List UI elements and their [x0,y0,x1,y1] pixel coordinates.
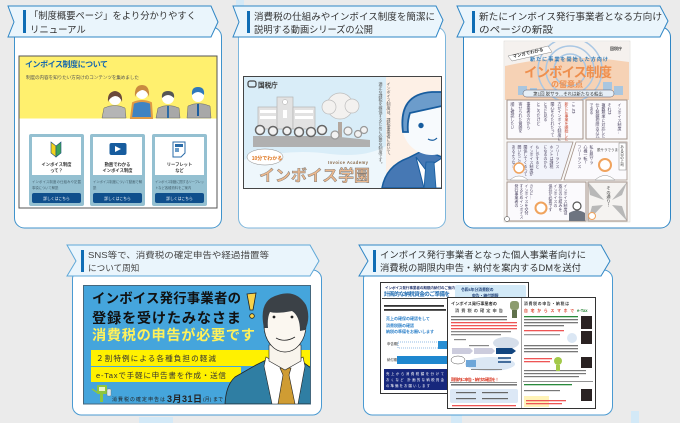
card: leaflets [152,134,207,206]
banner: panel 1 heading [8,6,218,37]
manga panel: row 3 left: インボイス制度は [563,183,568,216]
banner: panel 1 heading: リニューアル [30,24,86,35]
banner: panel 2 heading: 説明する動画シリーズの公開 [254,24,373,35]
manga panel: row 2 right: 脱サラでうまく [597,147,622,152]
card: leaflets: インボイス制度に関するリーフレッ [155,179,204,184]
yellow strip: e-Tax: e-Taxで手軽に申告書を作成・送信 [96,370,226,380]
manga panel: row 2 left [507,142,573,180]
manga panel: row 1 left: ここは [571,101,576,114]
manga panel: row 1 right: である [589,103,594,115]
front sheet: flow diagram [451,337,519,371]
background connector shapes [139,0,639,423]
manga panel: row 2 left: になるのかも [543,145,548,168]
yellow strip: 20% special provision [91,350,310,366]
manga panel: row 3 left: インボイスの [553,183,558,208]
manga subtitle bubble: マンガでわかる [512,46,544,60]
card: leaflets: など [175,167,184,173]
mascot: tax robot [510,301,519,318]
mascot: green robot [92,385,111,402]
manga panel: row 3 left: 発行事業者の [514,183,520,208]
thumbnail title: インボイス学園 [259,166,370,185]
card: video explanation [90,134,145,206]
illustration: businessman [225,293,311,404]
manga panel: row 2 left: もしかすると [535,144,540,168]
chapter banner: 第1回 脱サラ…それは新たなる船出 [533,90,603,98]
manga panel: row 2 right: フリーランス [577,144,582,169]
direct mail: back sheet [380,282,528,394]
manga panel: row 1 left: 順に確認したい [510,101,516,129]
manga panel: row 1 left: 関心をもたれたって [550,101,556,137]
banner: panel 1 heading: 「制度概要ページ」をより分かりやすく [29,10,196,21]
card: what is the invoice system: 事項について解説 [32,185,59,190]
front sheet: schedule table [450,384,518,406]
front sheet: right page heading: 自宅からスマホで [524,308,574,313]
banner: panel 3 heading: 新たにインボイス発行事業者となる方向け [479,11,662,22]
manga lead text: 新たに事業を開始した方向け [530,56,608,63]
screenshot: invoice system page [19,56,217,208]
panel: direct mail [359,245,612,415]
card: what is the invoice system: 詳しくはこちら [43,196,70,201]
manga panel: row 3 left: 保存が必要です [548,183,554,212]
manga panel: row 2 left: インボイス制度が [529,144,534,177]
manga panel: row 2 right [564,142,627,180]
ad headline: 消費税の申告が必要です [92,327,255,344]
filing deadline: 消費税の確定申告は [112,396,165,403]
banner: panel 4 heading: について周知 [88,262,139,273]
manga panel: row 2 right: 心機一転！ [583,144,588,164]
icon: beginner mark [51,142,61,157]
manga page [504,38,630,222]
card: video explanation: インボイス制度について動画で解 [93,179,143,184]
manga panel: row 2 left: フリーランス [555,144,560,169]
character: woman and tax officer [536,202,585,221]
banner: panel 5 heading [359,245,610,276]
front sheet: left page body lines [451,316,517,335]
front sheet: right page heading: 消費税の申告・納税は [524,301,569,306]
illustration: students and staff [253,126,370,147]
direct mail: back sheet: 売上から消費税額を分けて [386,371,444,376]
manga header artwork [505,38,629,102]
card: video explanation: 説 [93,185,97,190]
front sheet: right page body [523,316,593,391]
banner: panel 5 heading: インボイス発行事業者となった個人事業者向けに [380,249,586,260]
manga title: インボイス制度 [524,65,612,80]
filing deadline: (月) まで [203,397,223,403]
manga panel: row 1 right [586,100,627,139]
SNS ad banner [84,286,311,404]
manga panel: row 1 right: 仕入税額控除の方式 [595,102,600,139]
manga panel: row 1 left: ところだけど [536,101,542,125]
yellow strip: e-Tax [91,367,241,382]
icon: exclamation mark [247,293,256,318]
panel: new page for new invoice issuers [457,6,670,228]
video thumbnail: invoice academy [243,76,462,188]
manga panel: row 1 left [507,100,583,142]
character: smiling woman [595,159,615,180]
direct mail: back sheet: 令和6年分消費税の [461,287,494,292]
direct mail: back sheet: の準備をお願いします [386,383,431,388]
vertical caption [378,82,390,164]
icon: document [173,142,185,157]
banner: panel 3 heading: のページの新設 [479,24,554,35]
logo: manga tax agency: 国税庁 [610,45,622,51]
manga title second line: の留意点 [551,79,583,89]
banner: panel 2 heading: 消費税の仕組みやインボイス制度を簡潔に [254,11,435,22]
vertical caption: 適正な課税を確保するために必要な制度です。 [378,81,384,166]
filing deadline [112,394,223,404]
mascot: green character [554,357,562,371]
ad headline: インボイス発行事業者の [92,290,241,306]
manga panel: row 1 left: 事業者の方から [526,101,532,130]
direct mail: back sheet: 売上の確保の確認をして [386,315,430,321]
panel: video series [233,6,462,228]
manga panel: row 3 left [507,182,586,221]
chapter banner [523,90,614,98]
manga panel: row 1 left: ときに見る [543,101,548,122]
english label: Invoice Academy [328,160,369,165]
manga panel: row 2 left: あるような… [511,144,516,168]
panel: redesigned overview page [8,6,222,228]
card: leaflets: 詳しくはこちら [166,196,193,201]
manga subtitle bubble [508,46,552,61]
manga panel: row 1 right: 複数税率に対応した [601,102,606,139]
direct mail: back sheet: 消費税額の確認 [386,322,414,328]
manga panel: row 3 right burst [588,182,627,221]
manga panel: row 2 left: ホントは課税 [549,144,554,169]
direct mail: back sheet: おくなど 計画的な納税資金 [386,377,445,382]
ad headline [92,290,255,344]
yellow note [524,396,566,407]
front sheet: left page heading [451,300,503,314]
filing deadline: 3月31日 [167,394,202,404]
manga panel: row 1 right: それは [607,102,612,115]
front sheet: red notice: 期限内に申告・納付の確認を！ [451,376,499,382]
direct mail: back sheet: 納税の準備をお願いします [386,328,434,334]
yellow strip: 20% special provision: ２割特例による各種負担の軽減 [96,353,216,363]
manga panel: row 2 right: 私も脱サラ [589,144,594,165]
manga panel: row 3 left: インボイスを交付 [524,183,530,216]
card: video explanation: インボイス制度 [103,167,133,174]
panel: SNS publicity [67,245,322,415]
character: woman thinking [510,163,528,180]
illustration: tree [322,93,359,142]
ad headline: 登録を受けたみなさま [92,310,241,327]
card: what is the invoice system: インボイス制度の仕組みや記載 [32,179,82,184]
card: what is the invoice system: って？ [50,168,63,173]
card: video explanation: 詳しくはこちら [104,196,131,201]
manga panel: row 2 right: ある日の上司 [619,144,624,167]
manga panel: row 1 right: インボイス制度… [617,102,622,134]
illustration: four staff members [102,85,211,118]
banner: panel 3 heading [457,6,668,37]
direct mail: back sheet: 申告・納付期限 [472,293,499,298]
banner: panel 5 heading: 消費税の期限内申告・納付を案内するDMを送付 [380,262,581,273]
manga panel: row 2 left: 聞いたことが [517,144,522,169]
direct mail: back sheet: 計画的な納税資金のご準備を [384,290,450,298]
card: leaflets: トなど各種資料をご案内 [155,185,191,190]
manga panel: row 3 left: するためインボイス [519,183,524,220]
page number [504,216,510,222]
card: what is the invoice system [29,134,84,206]
banner: panel 4 heading [67,245,319,276]
card: leaflets: リーフレット [167,162,192,168]
front sheet: right page heading [524,301,588,313]
manga panel: row 1 left: 方がインボイス制度に [557,101,562,142]
card: video explanation: 動画でわかる [105,161,130,168]
front sheet: left page heading: 消費税の確定申告 [455,307,503,314]
speech bubble: 10分でわかる [252,155,282,162]
icon: play button [110,143,126,155]
manga panel: row 1 left: 寄せられた質問を [518,101,524,133]
manga panel: row 2 left: 関係してくるって [523,144,528,176]
direct mail: back sheet: インボイス発行事業者の期限内納付のご案内 [385,285,455,290]
speech bubble [247,149,283,165]
direct mail: back sheet: 納付期限 [387,357,401,362]
front sheet: right page heading: e-Tax [577,308,588,313]
manga panel: row 3 left: 取引の仕組みを [558,183,564,211]
banner: panel 4 heading: SNS等で、消費税の確定申告や経過措置等 [88,249,269,260]
front sheet: left page heading: インボイス発行事業者の [451,300,497,307]
screenshot title: インボイス制度について [25,59,108,69]
logo: National Tax Agency [248,80,278,90]
manga panel: row 3 right burst: その通り！ [606,186,612,207]
screenshot subtitle: 制度の内容を知りたい方向けのコンテンツを集めました [26,74,139,81]
manga panel: row 1 left: 新たに事業を開始した [564,101,570,142]
direct mail: back sheet: 申告期限 [387,341,401,346]
card: what is the invoice system: インボイス制度 [42,161,72,168]
QR codes [581,316,592,401]
logo: National Tax Agency: 国税庁 [258,80,278,90]
manga panel: row 3 left: さらに… [529,183,534,200]
banner: panel 2 heading [233,6,443,37]
illustration: school building [258,97,315,129]
illustration: man in suit [381,91,441,188]
vertical caption: インボイス制度は、課税事業者において、 [386,82,392,158]
direct mail: front sheet [448,298,596,408]
